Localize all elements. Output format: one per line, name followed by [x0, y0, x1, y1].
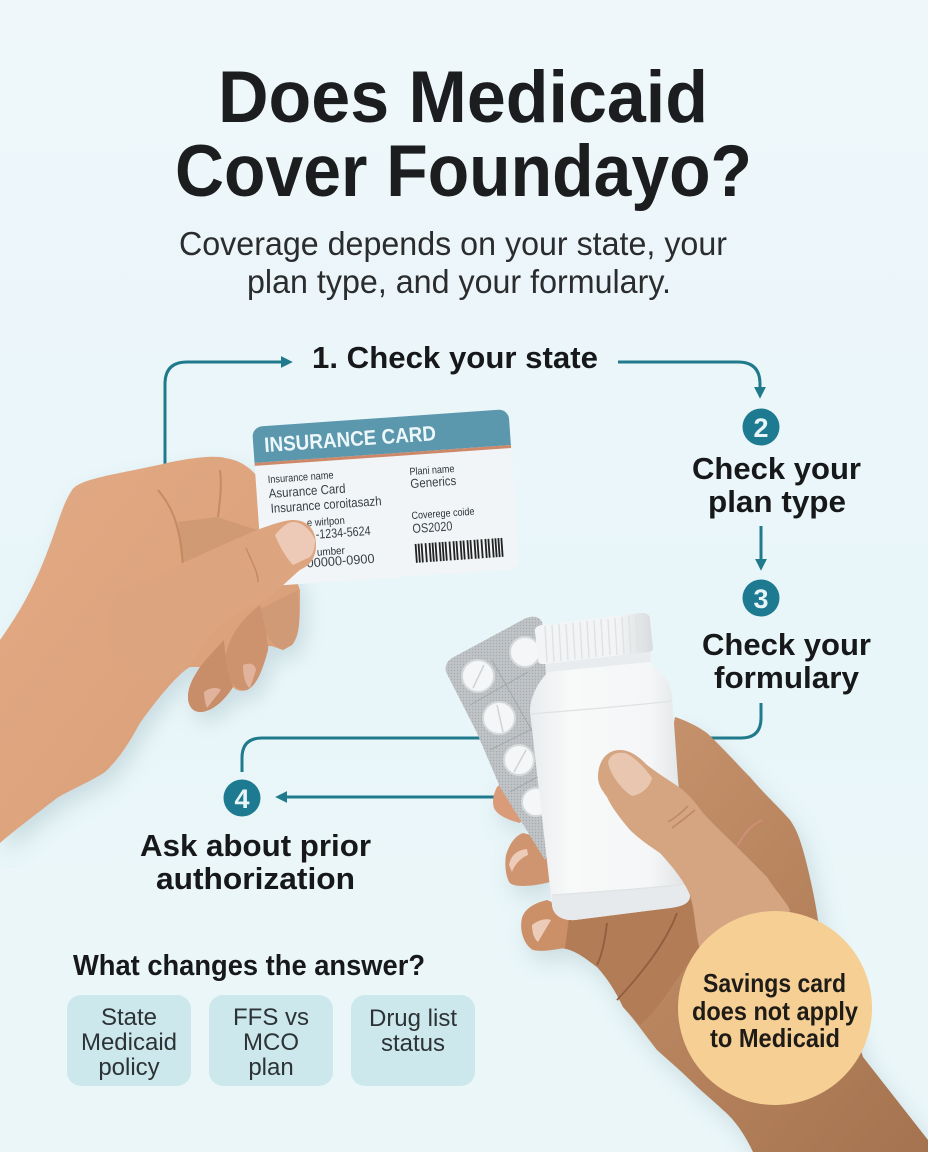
chip: drug list status: Drug list — [369, 1005, 457, 1032]
step 3 label: Check your — [702, 627, 871, 662]
chip: FFS vs MCO plan: FFS vs — [233, 1004, 309, 1031]
illustration: insurance card: Asurance Card — [268, 481, 346, 501]
illustration: insurance card: OS2020 — [412, 518, 453, 536]
chip: drug list status: status — [381, 1030, 445, 1057]
step 4 label — [140, 828, 371, 896]
illustration: right thumb — [598, 750, 790, 960]
callout: savings card: does not apply — [692, 996, 858, 1026]
title: Does Medicaid — [218, 57, 708, 138]
chip: FFS vs MCO plan: MCO — [243, 1029, 299, 1056]
illustration: insurance card: Insurance coroitasazh — [270, 493, 382, 516]
illustration: left thumb — [106, 520, 316, 680]
chip: state Medicaid policy — [67, 995, 191, 1086]
illustration: insurance card: Insurance name — [267, 469, 334, 486]
illustration: blister pack — [446, 617, 570, 860]
arrow: step 1 to step 2 — [618, 362, 760, 394]
step 2 label: plan type — [708, 484, 846, 519]
callout: savings card: to Medicaid — [710, 1023, 840, 1053]
illustration: insurance card: Coverege coide — [411, 506, 475, 522]
step 4 badge — [224, 780, 260, 816]
illustration: insurance card — [252, 409, 520, 587]
section heading: what changes the answer: What changes the answer? — [73, 950, 425, 982]
illustration: left hand — [0, 457, 300, 843]
title: Cover Foundayo? — [175, 131, 752, 212]
chip: state Medicaid policy: State — [101, 1004, 157, 1031]
illustration: pill bottle — [530, 613, 690, 920]
step 4 badge: 4 — [234, 784, 250, 814]
step 2 badge: 2 — [753, 413, 769, 443]
step 4 label: authorization — [156, 861, 355, 896]
subtitle: Coverage depends on your state, your — [179, 226, 727, 263]
chip: FFS vs MCO plan — [209, 995, 333, 1086]
arrow: bottle hand to step 4 — [280, 796, 496, 798]
illustration: insurance card: Generics — [410, 473, 457, 491]
arrow: step 2 to step 3 — [760, 526, 762, 566]
illustration: insurance card: Plani name — [409, 463, 455, 478]
chip: drug list status — [351, 995, 475, 1086]
arrow: hand to step 1 — [165, 362, 288, 470]
step 3 badge — [742, 580, 780, 616]
chip: state Medicaid policy: Medicaid — [81, 1029, 177, 1056]
step 3 label — [702, 627, 871, 695]
callout: savings card — [678, 911, 872, 1105]
step 3 badge: 3 — [753, 584, 769, 614]
illustration: insurance card: umber — [317, 545, 346, 559]
step 4 label: Ask about prior — [140, 828, 371, 863]
chip: state Medicaid policy: policy — [98, 1054, 160, 1081]
callout: savings card: Savings card — [703, 968, 846, 998]
illustration: insurance card: -1234-5624 — [315, 523, 371, 542]
illustration: insurance card: 00000-0900 — [306, 551, 375, 571]
subtitle: plan type, and your formulary. — [247, 264, 671, 301]
illustration: right hand — [493, 717, 928, 1152]
illustration: insurance card: INSURANCE CARD — [264, 422, 437, 457]
arrow: step 3 loop to step 4 — [242, 703, 761, 772]
subtitle — [179, 226, 727, 301]
step 1 label: 1. Check your state — [312, 340, 598, 375]
step 3 label: formulary — [714, 660, 860, 695]
step 2 label: Check your — [692, 451, 861, 486]
illustration: insurance card: e wirlpon — [306, 515, 345, 529]
title — [175, 57, 752, 212]
step 2 label — [692, 451, 861, 519]
chip: FFS vs MCO plan: plan — [248, 1054, 294, 1081]
step 2 badge — [742, 408, 780, 446]
